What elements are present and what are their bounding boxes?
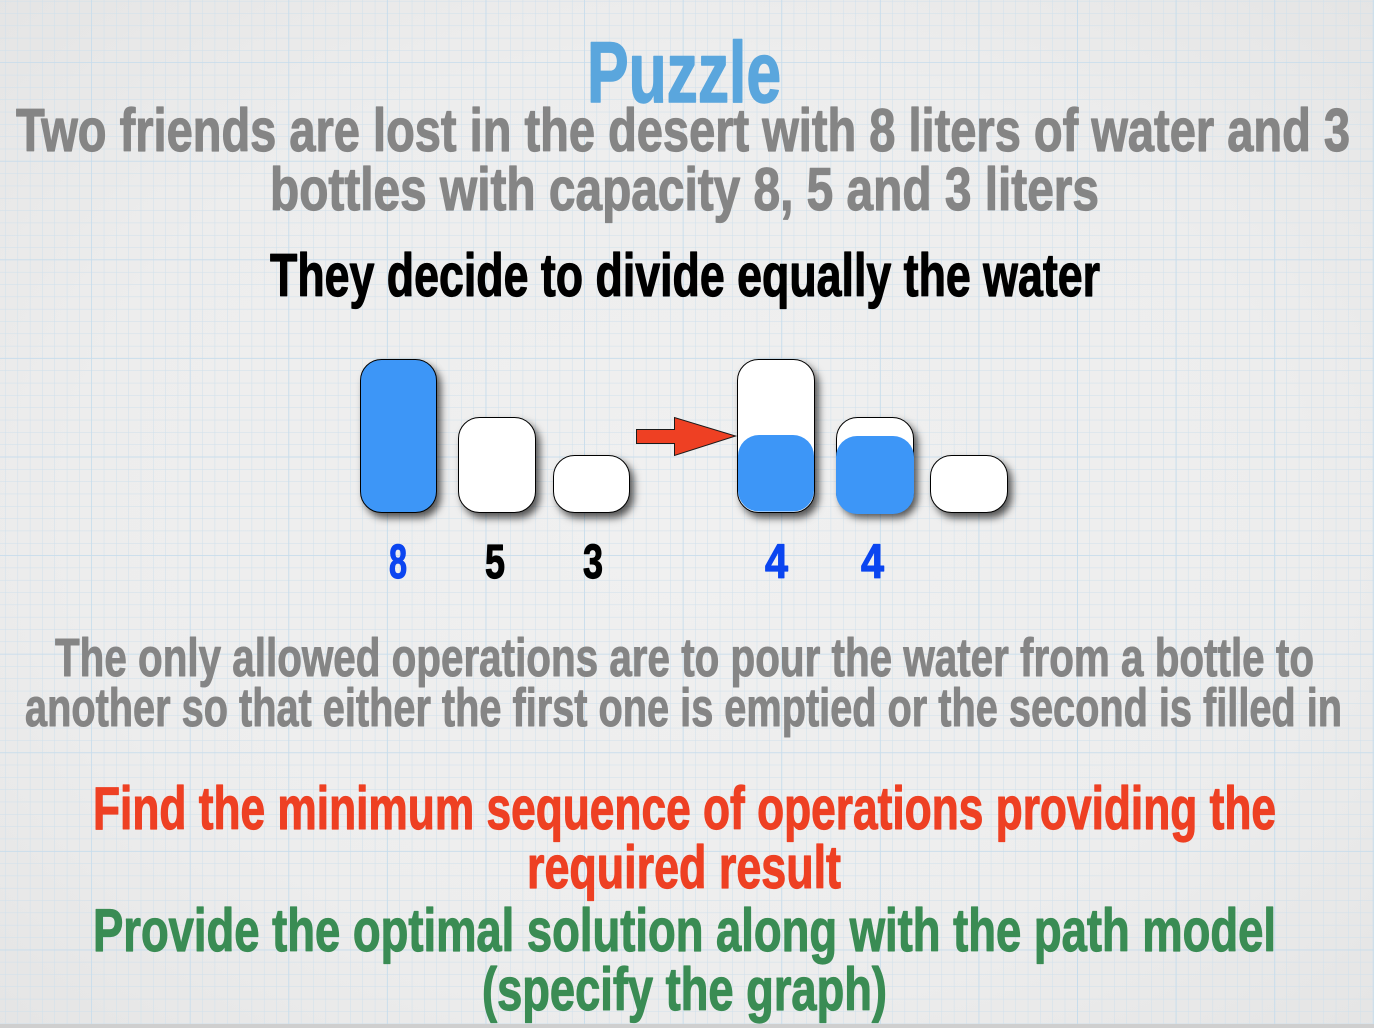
bottle: 8 liters holding 4: [738, 360, 814, 512]
bottle capacity labels: 5: [485, 536, 505, 589]
task: find minimum sequence: required result: [527, 834, 841, 901]
task: find minimum sequence: [93, 775, 1276, 901]
intro text: [16, 97, 1350, 223]
bottle: 3 liters empty: [930, 456, 1008, 512]
bottle capacity labels: 4: [765, 536, 788, 589]
intro text: bottles with capacity 8, 5 and 3 liters: [270, 156, 1099, 223]
bottle capacity labels: 3: [583, 536, 603, 589]
bottle: 5 liters holding 4: [836, 418, 914, 514]
task: provide optimal solution: (specify the graph): [482, 956, 887, 1023]
arrow: [636, 418, 736, 456]
bottle capacity labels: [389, 536, 884, 589]
bottle: 3 liters empty: [554, 456, 630, 512]
task: provide optimal solution: [93, 897, 1276, 1023]
rules text: [25, 628, 1342, 738]
goal statement: They decide to divide equally the water: [270, 242, 1100, 309]
diagram: bottles before: [360, 360, 630, 512]
bottle capacity labels: 8: [389, 536, 407, 589]
bottle: 8 liters full: [360, 360, 436, 512]
bottle: 5 liters empty: [458, 418, 536, 512]
diagram: bottles after: [738, 360, 1008, 514]
bottle capacity labels: 4: [861, 536, 884, 589]
title: Puzzle: [587, 25, 781, 121]
